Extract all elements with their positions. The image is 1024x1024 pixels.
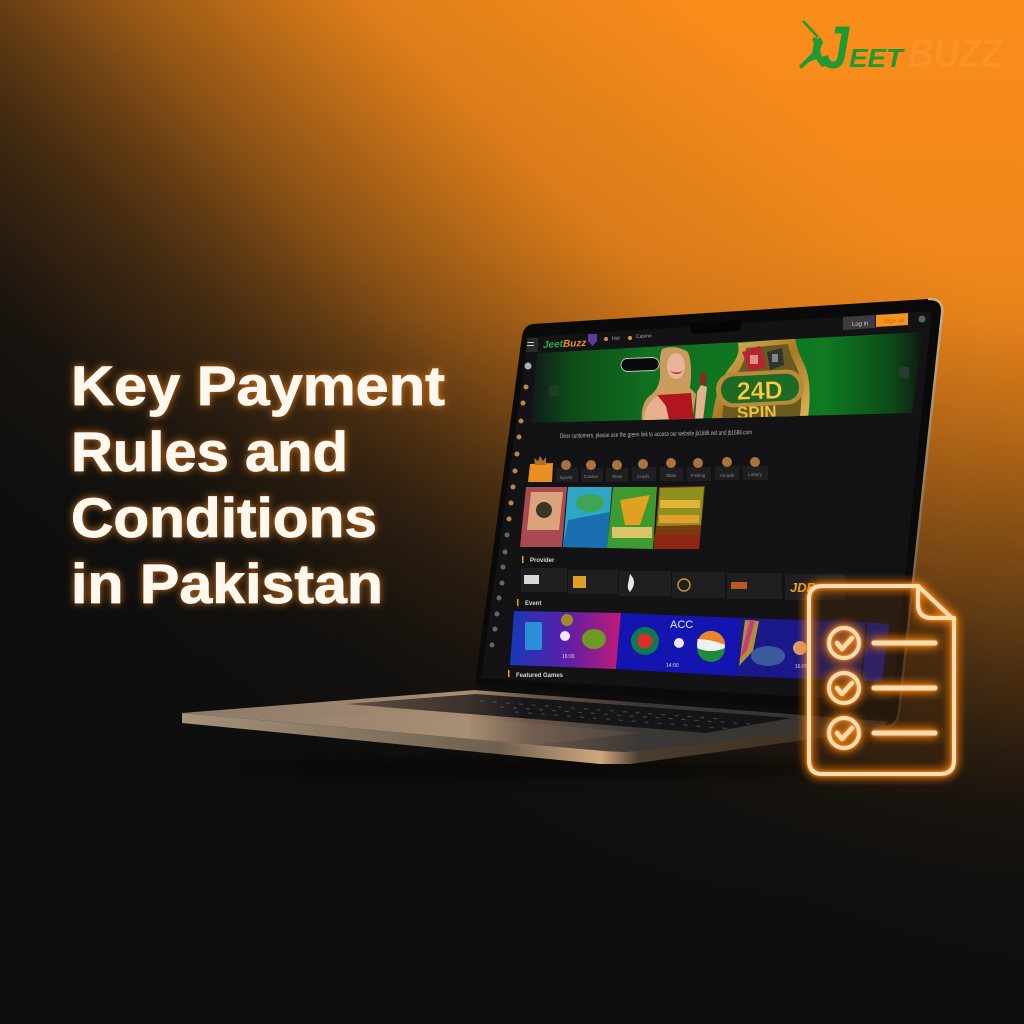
game cards (520, 486, 705, 549)
logo: JeetBuzz (799, 14, 1003, 81)
title: Rules and (71, 420, 348, 483)
keyboard key highlights (480, 701, 750, 729)
title (71, 354, 445, 615)
top navigation bar: Casino (636, 333, 652, 340)
top navigation bar: Sign up (884, 318, 905, 325)
camera notch (690, 320, 742, 334)
prize badge (712, 338, 810, 423)
category tabs: Lottery (748, 472, 763, 477)
laptop base (182, 684, 895, 764)
screen (481, 311, 932, 702)
title: Conditions (71, 486, 377, 549)
hero banner (530, 332, 923, 424)
top navigation bar: Hot (612, 336, 620, 342)
category tabs: Crash (637, 474, 649, 479)
icon: cricket batsman (799, 21, 826, 69)
event section: ACC (670, 619, 693, 631)
document outline (809, 586, 954, 774)
prize badge: SPIN (737, 402, 777, 423)
provider row (521, 556, 845, 600)
category tabs: Table (666, 473, 677, 478)
event section: 16:00 (562, 654, 575, 660)
laptop lid frame (475, 299, 942, 727)
featured games label: Featured Games (516, 673, 564, 679)
live badge (621, 357, 659, 372)
checklist row 3 (829, 718, 935, 748)
category tabs: Arcade (720, 473, 735, 478)
checklist document icon (809, 586, 954, 774)
laptop shadow (230, 760, 890, 776)
featured games label (508, 670, 563, 677)
category tabs: Sports (559, 475, 573, 480)
top navigation bar: JeetBuzz (543, 338, 586, 351)
event section: 14:00 (666, 663, 679, 669)
event section (510, 599, 889, 682)
top navigation bar (523, 313, 926, 352)
category tabs: Casino (584, 474, 598, 479)
prize badge: 24D (736, 376, 783, 406)
category tabs (528, 456, 768, 482)
lid metal edge (884, 299, 942, 727)
category tabs: Slots (612, 474, 623, 479)
checklist row 2 (829, 673, 935, 703)
event section: Event (525, 601, 541, 607)
notice text: Dear customers, please use the green link to access our website jb1688.net and jb1688.com (560, 429, 752, 440)
title: in Pakistan (71, 552, 383, 615)
sidebar icons (490, 362, 532, 648)
event section: 16:00 (795, 664, 808, 670)
laptop (182, 299, 942, 776)
logo: JeetBuzz: BUZZ (908, 32, 1003, 76)
provider row: Provider (530, 558, 555, 564)
category tabs: Fishing (691, 473, 706, 478)
logo: JeetBuzz: J (821, 14, 850, 81)
provider row: JDB (790, 580, 816, 595)
slider buttons (549, 385, 559, 396)
dealer figure (642, 347, 707, 424)
top navigation bar: Log in (852, 321, 868, 328)
logo: JeetBuzz: EET (849, 43, 905, 73)
title: Key Payment (71, 354, 445, 417)
checklist row 1 (829, 628, 935, 658)
document glass panel (809, 586, 954, 774)
